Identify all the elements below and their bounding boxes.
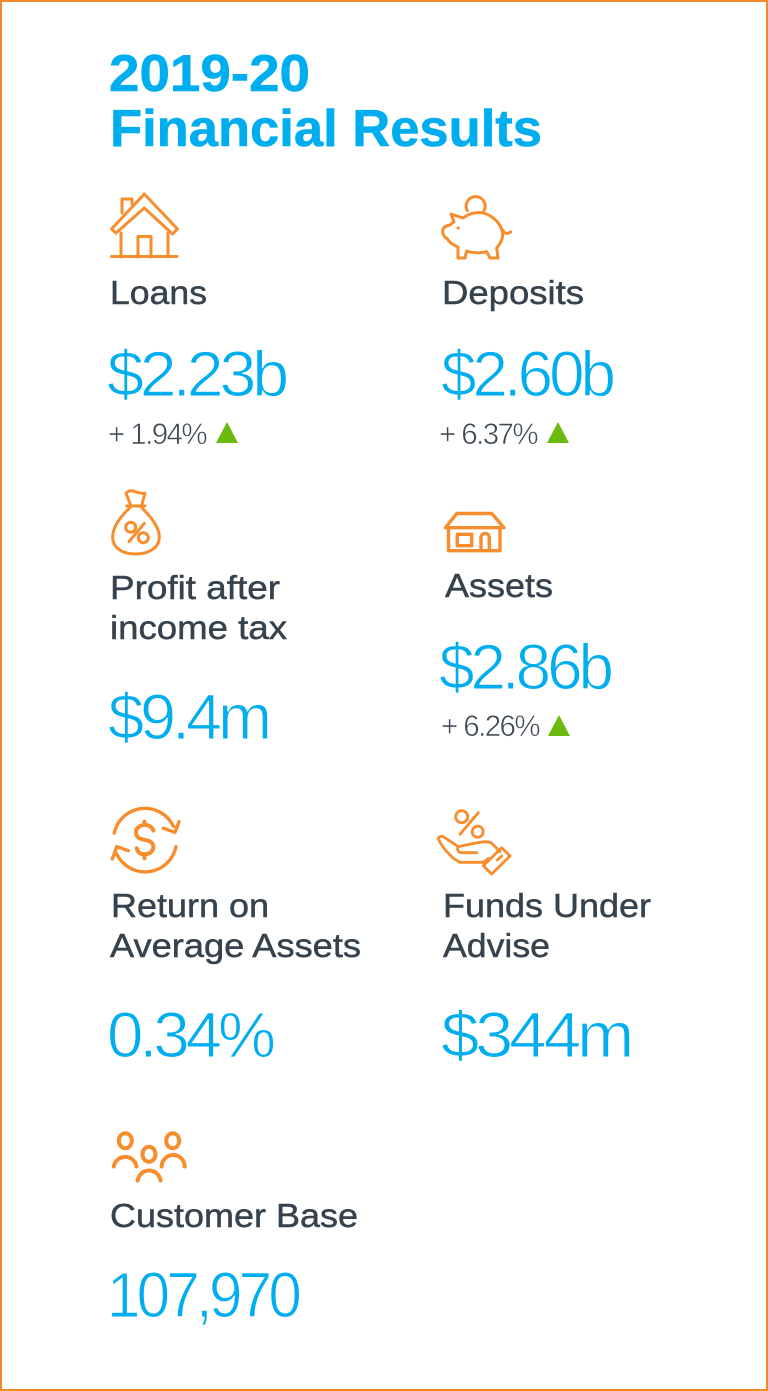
title: 2019-20	[109, 45, 310, 103]
funds label: Funds Under	[443, 887, 651, 924]
icon: piggy bank	[443, 197, 511, 258]
deposits label: Deposits	[442, 274, 584, 311]
loans value: $2.23b	[107, 338, 286, 410]
panel: assets	[439, 514, 611, 743]
assets change: + 6.26%	[441, 710, 540, 743]
return value: 0.34%	[107, 999, 274, 1071]
profit label: Profit after	[110, 569, 280, 606]
icon: three people	[114, 1133, 185, 1180]
panel: customer base	[107, 1133, 358, 1331]
icon: money bag	[113, 491, 159, 554]
icon: up triangle	[216, 422, 238, 443]
panel: funds under advise	[438, 811, 651, 1071]
return label: Return on	[111, 887, 269, 924]
icon: dollar cycle	[112, 808, 179, 872]
icon: hand with percent	[438, 811, 510, 874]
customer label: Customer Base	[110, 1197, 358, 1234]
panel: profit: income tax	[110, 609, 288, 646]
icon: up triangle	[547, 422, 569, 443]
icon: up triangle	[548, 715, 570, 736]
icon: shop	[446, 514, 504, 551]
funds value: $344m	[441, 999, 631, 1071]
loans change: + 1.94%	[108, 418, 207, 451]
panel: return on average assets	[107, 808, 361, 1071]
deposits change: + 6.37%	[439, 418, 538, 451]
assets value: $2.86b	[439, 631, 611, 703]
panel: return on average assets: Average Assets	[110, 927, 361, 964]
panel: deposits	[439, 197, 613, 451]
profit value: $9.4m	[108, 681, 269, 753]
assets label: Assets	[445, 567, 553, 604]
panel: funds under advise: Advise	[443, 927, 550, 964]
icon: house	[112, 194, 178, 257]
panel: profit	[108, 491, 288, 753]
loans label: Loans	[110, 274, 207, 311]
customer value: 107,970	[107, 1259, 300, 1331]
title: Financial Results	[110, 100, 542, 158]
panel: loans	[107, 194, 286, 451]
title	[109, 45, 542, 158]
deposits value: $2.60b	[441, 338, 613, 410]
